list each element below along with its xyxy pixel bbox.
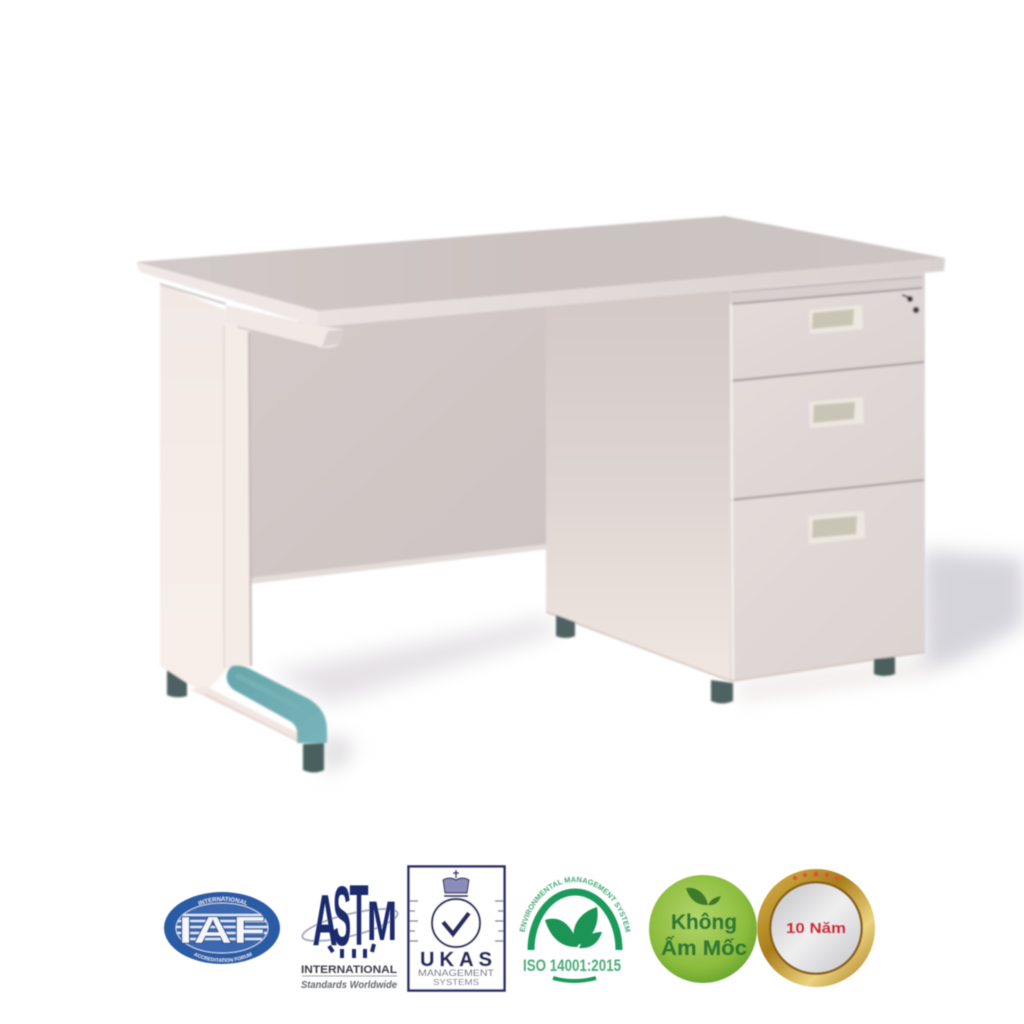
foot rail [190,686,298,741]
drawer gap 2 [730,480,924,500]
teal foot cover [227,665,327,743]
left leg panel [160,283,252,694]
badge: Không Ấm Mốc [649,875,757,983]
logo: UKAS: MANAGEMENT [418,968,495,978]
casters [556,615,895,704]
modesty panel lower lip [250,544,548,584]
drawer 1 [732,290,925,380]
crown [443,878,469,893]
lock [902,295,919,313]
logo: ASTM: M [367,889,397,952]
badge: Không Ấm Mốc: Ấm Mốc [661,937,747,960]
pedestal bottom edge shadow [546,612,925,681]
logo: ASTM: T [350,868,368,964]
front foot [303,743,324,772]
logo: UKAS: UKAS [420,949,492,971]
logo: ISO 14001 [518,876,632,984]
back modesty panel [246,306,548,578]
drawer gap 1 [730,362,924,381]
logo: ASTM: A [312,881,338,961]
pedestal edge highlight [731,304,733,681]
desktop surface [136,216,945,311]
logo: ASTM: Standards Worldwide [301,980,397,991]
badge: 10 Năm: 10 Năm [786,920,846,937]
left bracket under top [226,305,344,348]
badge: Không Ấm Mốc: Không [671,911,737,934]
logo: ISO 14001: ENVIRONMENTAL MANAGEMENT SYSTEM [518,876,632,933]
desk floor shadows [272,550,1024,770]
drawer 2 [732,364,925,499]
handle 3 [808,511,865,544]
illustration: office desk [136,216,945,772]
logo: ASTM: S [333,869,351,963]
pedestal side panel [546,290,732,682]
pedestal front [730,272,925,682]
drawer 3 [732,482,925,680]
rear foot [167,670,187,697]
logo: ASTM [300,868,400,991]
logo: IAF: INTERNATIONAL [197,896,248,906]
desktop front edge [136,262,318,327]
logo: IAF: IAF [178,910,266,952]
badge: 10 Năm [757,869,875,987]
logo: ISO 14001: ISO 14001:2015 [523,956,621,975]
logo: UKAS [408,866,504,990]
handle 2 [809,397,864,428]
leaves [545,919,578,947]
logo: IAF [163,891,281,965]
logo: UKAS: SYSTEMS [433,978,479,987]
drawer top rail [730,274,924,304]
desktop right edge [318,258,945,327]
certification logos [163,864,876,993]
logo: IAF: ACCREDITATION FORUM [193,952,253,963]
handle 1 [809,305,863,334]
logo: ASTM: INTERNATIONAL [301,964,397,976]
